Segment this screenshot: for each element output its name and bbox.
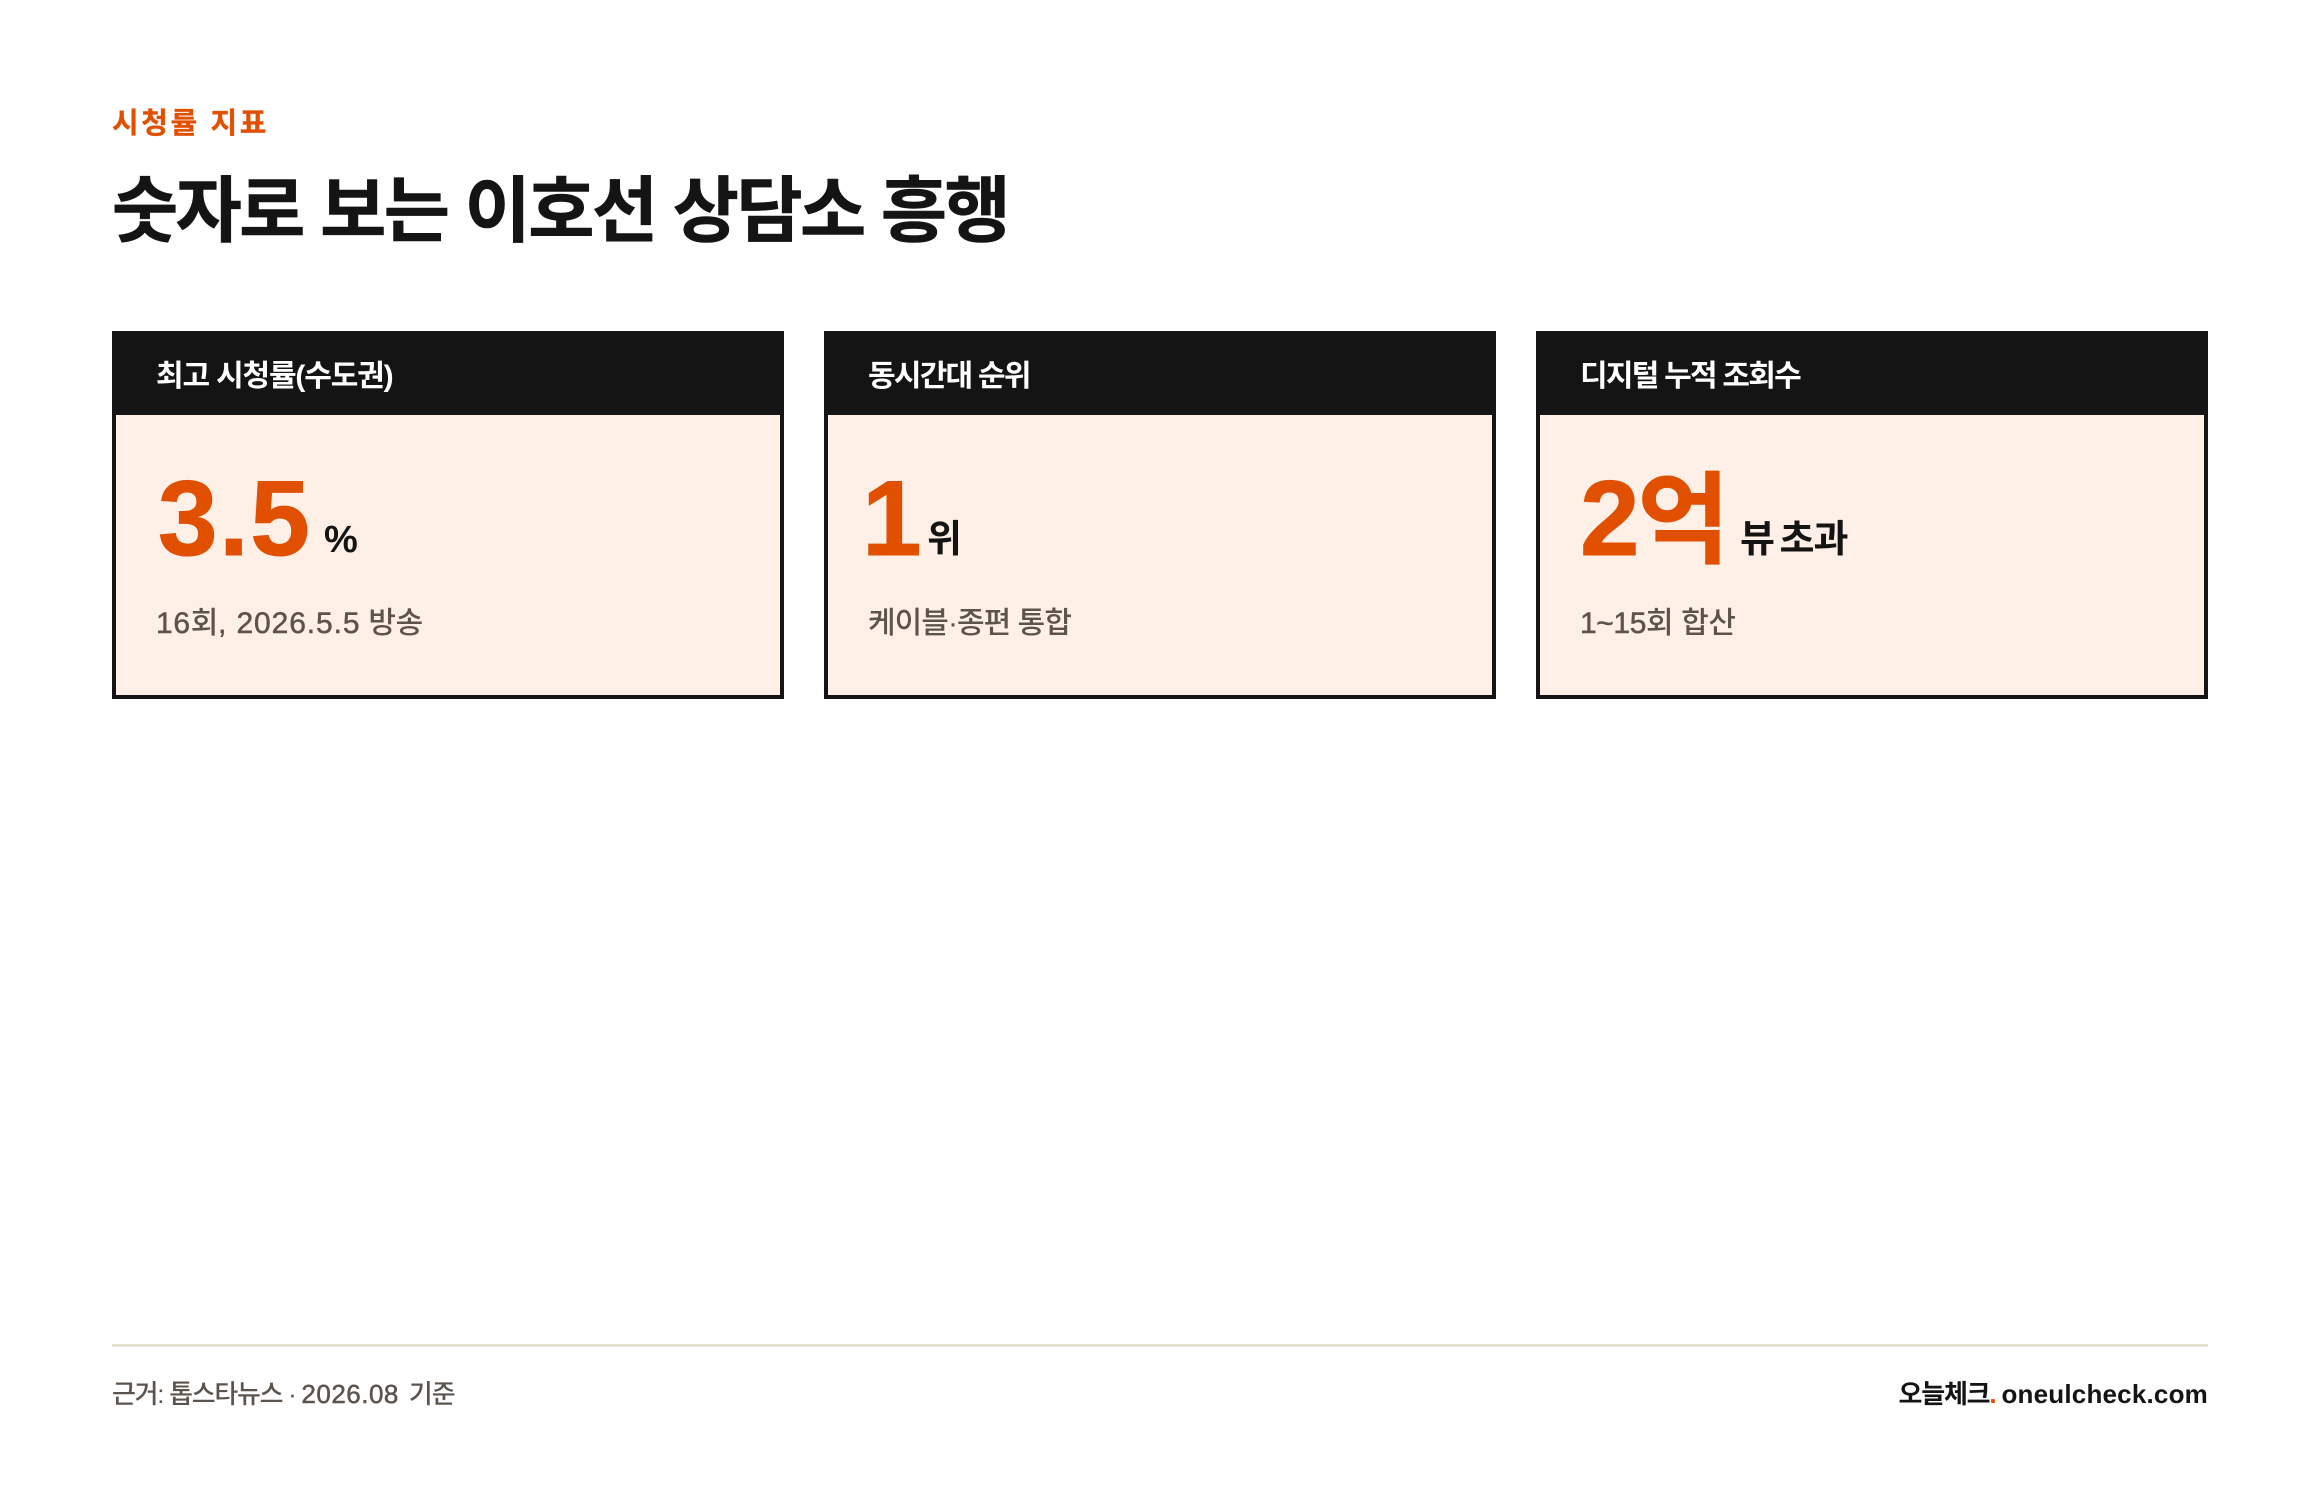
- value: 3.5: 3.5: [158, 458, 311, 578]
- panel: time slot rank: [824, 331, 1496, 699]
- footer brand: 오늘체크. oneulcheck.com: [1898, 1379, 2208, 1409]
- card header: peak rating: [112, 331, 784, 415]
- panel: digital views: [1536, 331, 2208, 699]
- note: episodes summed: 1~15회 합산: [1580, 607, 1736, 640]
- card header: digital views: [1536, 331, 2208, 415]
- value: 1: 1: [862, 458, 923, 578]
- note: broadcast date: 16회, 2026.5.5 방송: [156, 607, 423, 640]
- card header: peak rating: 최고 시청률(수도권): [156, 360, 392, 393]
- unit: percent: %: [324, 519, 357, 561]
- value: 200 million: 2억: [1580, 458, 1728, 578]
- unit: rank: 위: [927, 519, 961, 561]
- card header: time slot rank: 동시간대 순위: [868, 360, 1030, 393]
- card header: digital views: 디지털 누적 조회수: [1580, 360, 1800, 393]
- eyebrow label: 시청률 지표: [112, 108, 269, 140]
- card header: time slot rank: [824, 331, 1496, 415]
- footer rule: [112, 1344, 2208, 1347]
- note: rank scope: 케이블·종편 통합: [868, 607, 1071, 640]
- footer source: 근거: 톱스타뉴스 · 2026.08 기준: [112, 1379, 455, 1409]
- unit: views exceeded: 뷰 초과: [1740, 519, 1847, 561]
- panel: peak rating: [112, 331, 784, 699]
- title: 숫자로 보는 이호선 상담소 흥행: [112, 172, 1008, 252]
